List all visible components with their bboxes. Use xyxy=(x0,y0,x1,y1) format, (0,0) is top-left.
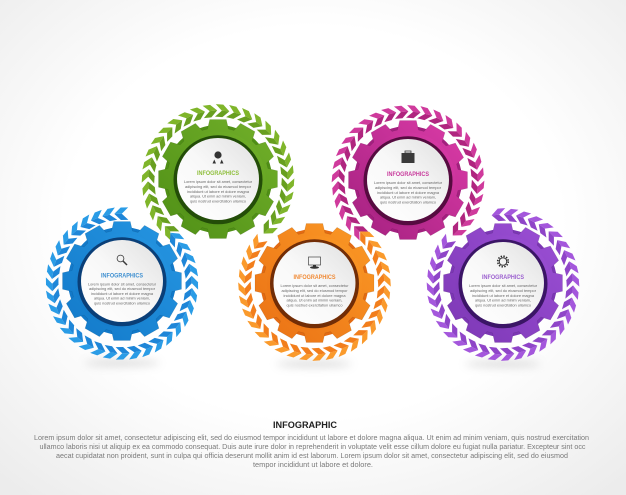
purple body text: incididunt ut labore et dolore magna xyxy=(472,293,535,298)
magenta body text: incididunt ut labore et dolore magna xyxy=(377,190,440,195)
purple heading: INFOGRAPHICS xyxy=(482,274,524,281)
panel: purple gear xyxy=(409,203,579,368)
purple body text: Lorem ipsum dolor sit amet, consectetur xyxy=(469,283,538,288)
orange body text: incididunt ut labore et dolore magna xyxy=(284,293,346,298)
purple body text xyxy=(469,283,538,308)
icon: people xyxy=(212,151,224,164)
blue body text: quis nostrud exercitation ullamco xyxy=(94,301,150,306)
footer text block: ullamco laboris nisi ut aliquip ex ea commodo consequat. Duis aute irure dolor in reprehenderit in voluptate velit esse cillum dolore eu fugiat nulla pariatur. Excepteur sint occ xyxy=(40,442,586,451)
magenta body text: adipiscing elit, sed do eiusmod tempor xyxy=(375,185,442,190)
green body text: adipiscing elit, sed do eiusmod tempor xyxy=(185,184,252,189)
green heading: INFOGRAPHICS xyxy=(197,170,239,177)
blue body text: aliqua. Ut enim ad minim veniam, xyxy=(94,296,150,301)
magenta body text: Lorem ipsum dolor sit amet, consectetur xyxy=(374,180,443,185)
magenta body text: quis nostrud exercitation ullamco xyxy=(380,200,436,204)
green body text: Lorem ipsum dolor sit amet, consectetur xyxy=(184,179,253,184)
icon: cog xyxy=(498,256,508,267)
purple body text: quis nostrud exercitation ullamco xyxy=(475,302,531,308)
orange body text xyxy=(280,283,349,308)
footer text block: aecat cupidatat non proident, sunt in culpa qui officia deserunt mollit anim id est laborum. Lorem ipsum dolor sit amet, consectetur adipiscing elit, sed do eiusmod xyxy=(56,451,568,460)
blue gear body xyxy=(62,222,182,340)
panel: blue gear xyxy=(24,207,229,388)
magenta heading: INFOGRAPHICS xyxy=(387,171,429,178)
green body text: incididunt ut labore et dolore magna xyxy=(187,189,250,194)
green body text: aliqua. Ut enim ad minim veniam, xyxy=(190,194,246,199)
icon: briefcase xyxy=(402,151,414,163)
purple body text: aliqua. Ut enim ad minim veniam, xyxy=(475,298,531,303)
purple body text: adipiscing elit, sed do eiusmod tempor xyxy=(470,288,537,293)
green body text xyxy=(184,179,253,204)
green gear body xyxy=(158,120,278,238)
blue body text xyxy=(88,281,157,306)
orange heading: INFOGRAPHICS xyxy=(294,274,336,281)
orange info disc xyxy=(274,242,356,324)
orange body text: quis nostrud exercitation ullamco xyxy=(286,302,342,308)
orange body text: adipiscing elit, sed do eiusmod tempor xyxy=(282,288,348,293)
icon: monitor xyxy=(308,257,320,269)
panel: magenta gear xyxy=(300,76,508,242)
footer text block: Lorem ipsum dolor sit amet, consectetur adipiscing elit, sed do eiusmod tempor incididunt ut labore et dolore magna aliqua. Ut enim ad minim veniam, quis nostrud exercitation xyxy=(34,433,589,442)
green body text: quis nostrud exercitation ullamco xyxy=(190,198,246,204)
blue body text: Lorem ipsum dolor sit amet, consectetur xyxy=(88,281,157,286)
magenta gear body xyxy=(348,120,468,240)
orange chevron ring xyxy=(238,227,422,390)
footer title: INFOGRAPHIC xyxy=(273,420,337,431)
magenta chevron ring xyxy=(300,76,508,242)
footer text block xyxy=(34,433,589,469)
magenta body text: aliqua. Ut enim ad minim veniam, xyxy=(380,195,436,200)
footer text block: tempor incididunt ut labore et dolore. xyxy=(253,460,373,469)
magenta info disc xyxy=(367,139,449,221)
orange gear body xyxy=(255,224,374,342)
blue body text: incididunt ut labore et dolore magna xyxy=(91,291,154,296)
purple info disc xyxy=(462,242,544,324)
purple gear body xyxy=(444,224,562,342)
panel: green gear xyxy=(110,74,319,240)
purple chevron ring xyxy=(409,203,579,368)
icon: magnifier xyxy=(117,255,127,265)
panel: orange gear xyxy=(238,224,422,390)
green chevron ring xyxy=(110,74,319,240)
green info disc xyxy=(177,138,259,220)
blue body text: adipiscing elit, sed do eiusmod tempor xyxy=(89,286,156,291)
orange body text: Lorem ipsum dolor sit amet, consectetur xyxy=(280,283,349,288)
blue heading: INFOGRAPHICS xyxy=(101,272,143,280)
blue info disc xyxy=(81,240,163,322)
ground shadows xyxy=(84,360,541,367)
orange body text: aliqua. Ut enim ad minim veniam, xyxy=(286,298,342,303)
blue chevron ring xyxy=(24,207,229,388)
magenta body text xyxy=(374,180,443,204)
